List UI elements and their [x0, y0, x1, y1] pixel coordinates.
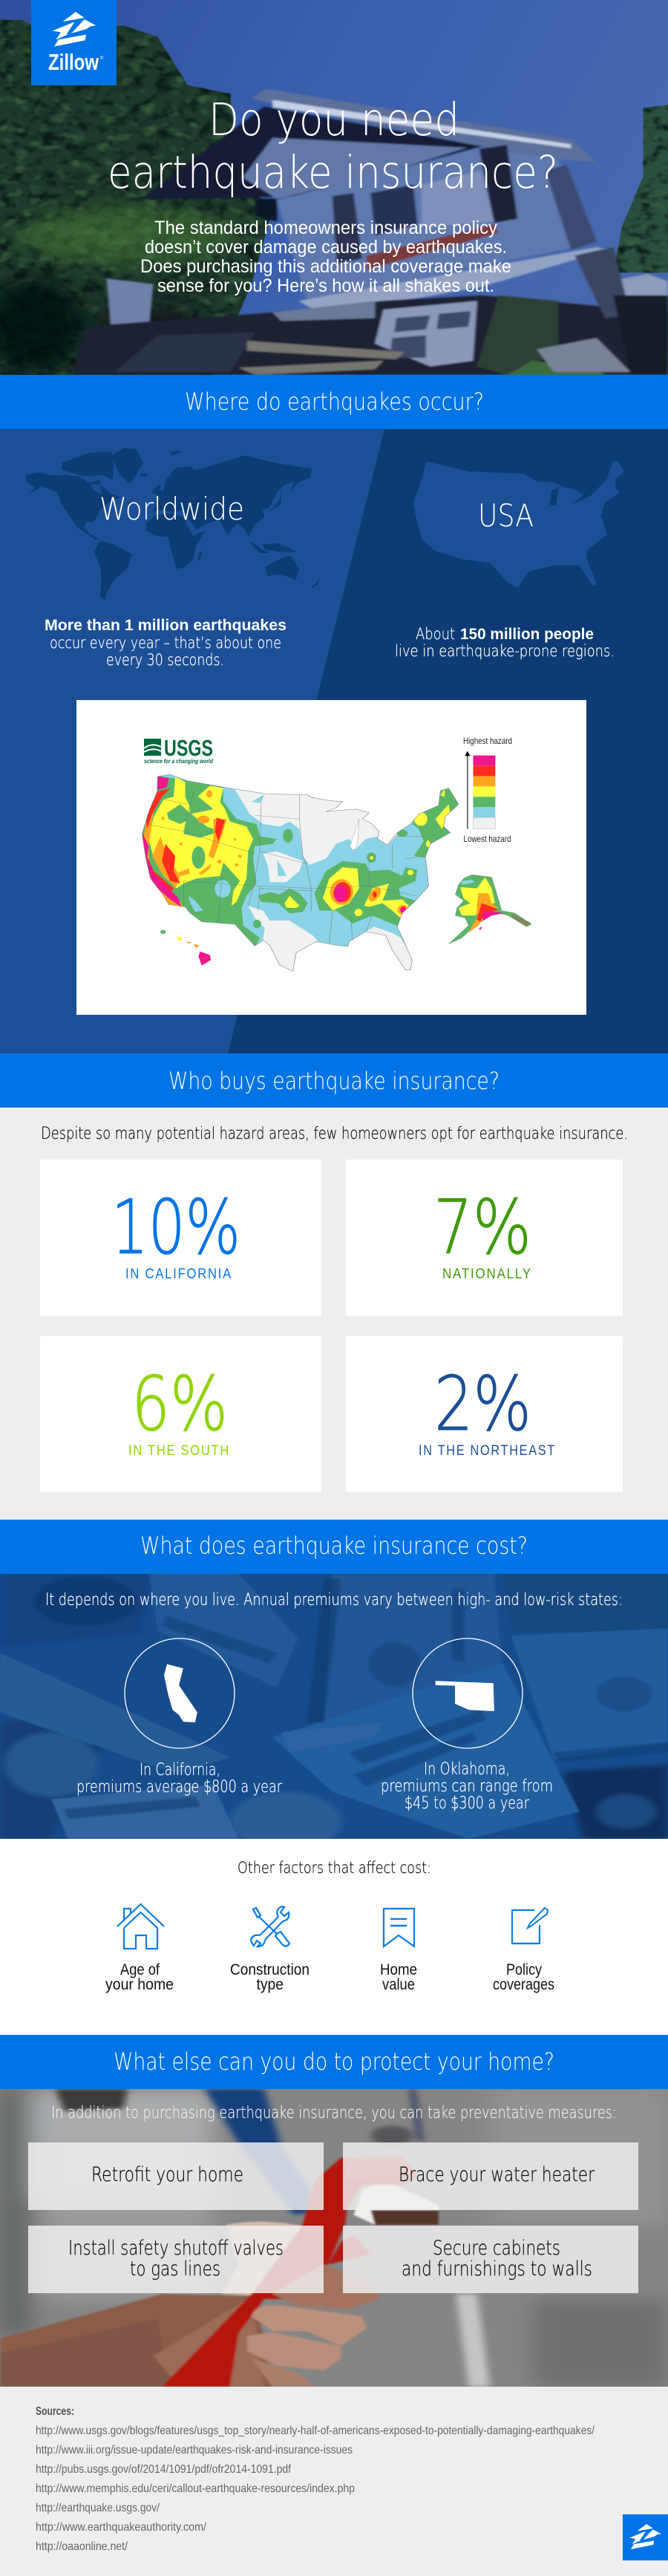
stat card: California: IN CALIFORNIA [125, 1266, 232, 1282]
icon: USGS logo [144, 735, 214, 765]
factor: home value [380, 1909, 417, 1993]
logo: Zillow badge: Zillow [48, 49, 99, 75]
icon: bookmark [384, 1909, 414, 1946]
panel: USGS hazard map card [76, 700, 586, 1015]
stat card: northeast: 2% [434, 1360, 531, 1448]
icon: USGS logo: USGS [164, 735, 213, 761]
icon: USGS logo: science for a changing world [144, 758, 214, 765]
stat card: California: 10% [111, 1183, 240, 1271]
California premium text [76, 1761, 283, 1797]
panel: sources: http://pubs.usgs.gov/of/2014/1091/pdf/ofr2014-1091.pdf [36, 2463, 291, 2476]
California premium text: In California, [140, 1761, 220, 1779]
title: earthquake insurance? [108, 146, 558, 199]
factor: home value: value [382, 1976, 415, 1993]
Oklahoma premium text: In Oklahoma, [424, 1760, 510, 1779]
hawaii [160, 930, 211, 966]
measure: cabinets [343, 2226, 638, 2293]
heading band: cost [0, 1520, 668, 1574]
photo: hand with red wrench [0, 2089, 668, 2387]
USA stat text [395, 625, 615, 660]
hero intro text: Does purchasing this additional coverage make [140, 256, 511, 277]
title: Do you need [209, 94, 459, 146]
legend: hazard scale [463, 736, 512, 844]
hero intro text [140, 218, 511, 296]
heading: other factors: Other factors that affect cost: [238, 1859, 431, 1877]
chart: seismic hazard map [137, 772, 531, 975]
USA stat text: live in earthquake-prone regions. [395, 642, 615, 660]
heading band: where do earthquakes occur [0, 375, 668, 429]
heading band: protect: What else can you do to protect your home? [114, 2047, 554, 2076]
stat card: nationally: 7% [433, 1183, 531, 1271]
factor: age of home: Age of [120, 1961, 160, 1978]
stat card: south [40, 1336, 321, 1492]
measure: water heater: Brace your water heater [399, 2163, 595, 2186]
heading band: who buys: Who buys earthquake insurance? [168, 1067, 500, 1095]
measure: cabinets: Secure cabinets [433, 2237, 560, 2260]
measure: water heater [343, 2142, 638, 2210]
USA stat text: About [416, 625, 455, 643]
measure: retrofit [28, 2142, 324, 2210]
stat card: south: 6% [131, 1360, 228, 1448]
factor: construction type: Construction [230, 1961, 310, 1978]
measure: cabinets: and furnishings to walls [402, 2258, 592, 2281]
hero intro text: doesn’t cover damage caused by earthquakes. [145, 237, 507, 258]
icon: California in circle [125, 1638, 235, 1748]
factor: age of home: your home [105, 1976, 174, 1993]
panel: where background split [0, 429, 668, 1053]
hero intro text: The standard homeowners insurance policy [154, 218, 497, 238]
label: Worldwide: Worldwide [99, 491, 244, 527]
measure: shutoff valves [28, 2226, 324, 2293]
heading band: cost: What does earthquake insurance cost? [140, 1531, 528, 1560]
icon: note and pen [512, 1908, 548, 1944]
Oklahoma premium text [381, 1760, 553, 1813]
USA stat text: 150 million people [460, 626, 594, 643]
logo: corner Zillow badge [623, 2514, 668, 2560]
worldwide stat text: occur every year – that’s about one [50, 634, 281, 652]
stat card: California [40, 1160, 321, 1316]
heading band: who buys [0, 1053, 668, 1108]
factor: policy coverages: coverages [493, 1976, 554, 1993]
photo: money background [0, 1574, 668, 1839]
alaska [448, 875, 531, 944]
panel: sources: http://oaaonline.net/ [36, 2540, 128, 2553]
stat card: nationally: NATIONALLY [442, 1266, 532, 1282]
Oklahoma premium text: $45 to $300 a year [405, 1794, 530, 1813]
legend: hazard scale: Lowest hazard [463, 834, 511, 844]
logo: Zillow badge [31, 0, 117, 85]
factor: policy coverages [493, 1908, 554, 1993]
stat card: northeast: IN THE NORTHEAST [419, 1443, 556, 1459]
label: USA: USA [478, 497, 534, 534]
world map [26, 448, 321, 601]
heading band: where do earthquakes occur: Where do earthquakes occur? [185, 388, 484, 416]
icon: wrench and screwdriver [251, 1906, 289, 1946]
Oklahoma premium text: premiums can range from [381, 1777, 553, 1796]
panel: other factors [0, 1839, 668, 2035]
measure: shutoff valves: Install safety shutoff valves [68, 2237, 284, 2260]
worldwide stat text [45, 617, 286, 669]
California premium text: premiums average $800 a year [76, 1778, 283, 1797]
heading band: protect [0, 2035, 668, 2089]
stat card: northeast [346, 1336, 623, 1492]
factor: home value: Home [380, 1961, 417, 1978]
factor: construction type: type [257, 1976, 284, 1993]
USA map [413, 462, 624, 588]
panel: sources: http://www.memphis.edu/ceri/callout-earthquake-resources/index.php [36, 2482, 355, 2495]
logo: Zillow badge: ® [100, 56, 104, 61]
hero photo: collapsed house [0, 0, 668, 375]
panel: sources: http://www.iii.org/issue-update/earthquakes-risk-and-insurance-issues [36, 2444, 353, 2456]
panel: who buys background [0, 1108, 668, 1520]
stat card: south: IN THE SOUTH [128, 1443, 230, 1459]
factor: policy coverages: Policy [506, 1961, 542, 1978]
panel: sources [0, 2387, 668, 2576]
hero intro text: sense for you? Here’s how it all shakes out. [157, 275, 494, 296]
icon: Oklahoma in circle [413, 1638, 523, 1748]
panel: sources: http://www.earthquakeauthority.com/ [36, 2521, 206, 2534]
measure: retrofit: Retrofit your home [91, 2163, 243, 2186]
measure: shutoff valves: to gas lines [130, 2258, 220, 2281]
worldwide stat text: More than 1 million earthquakes [45, 617, 286, 634]
panel: sources: Sources: [36, 2405, 74, 2418]
panel: sources: http://earthquake.usgs.gov/ [36, 2502, 160, 2514]
icon: house [117, 1904, 164, 1949]
stat card: nationally [346, 1160, 623, 1316]
title [108, 94, 558, 199]
panel: sources: http://www.usgs.gov/blogs/features/usgs_top_story/nearly-half-of-americans-exposed-to-potentially-damaging-earthquakes/ [36, 2425, 595, 2437]
legend: hazard scale: Highest hazard [463, 736, 512, 746]
factor: age of home [105, 1904, 174, 1993]
factor: construction type [230, 1906, 310, 1993]
worldwide stat text: every 30 seconds. [106, 651, 224, 669]
